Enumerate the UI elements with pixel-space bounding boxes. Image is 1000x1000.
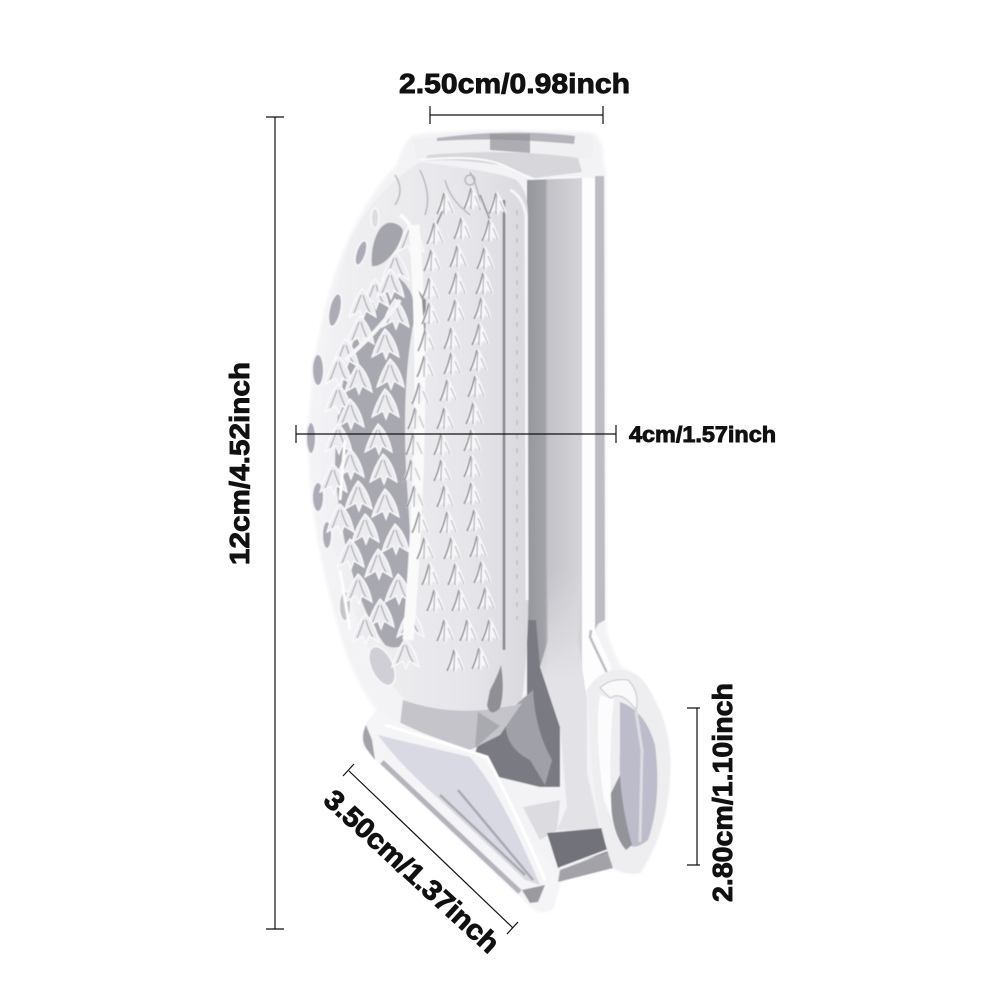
dimension: top width: 2.50cm/0.98inch: [399, 68, 630, 99]
oval recessed zone: [335, 223, 415, 647]
dimension: top width: [399, 68, 630, 124]
product: transparent sleeve: [306, 130, 670, 912]
dimension: total height: [224, 117, 284, 929]
textured panel: [320, 162, 528, 750]
side nubs: [306, 208, 401, 690]
neck rim: [414, 131, 593, 180]
dimension: bulb height: 2.80cm/1.10inch: [707, 683, 738, 902]
bottom flared lip: [362, 710, 560, 912]
embossed detail top-left: [395, 170, 492, 240]
smooth shaft with vertical shading: [470, 176, 613, 882]
side bulb: [587, 670, 670, 873]
dimension: bulb height: [687, 683, 738, 902]
scale texture: panel columns: [403, 186, 507, 673]
scale texture: inner oval: [320, 224, 424, 669]
dimension: lip width: 3.50cm/1.37inch: [318, 784, 506, 959]
dimension: total height: 12cm/4.52inch: [224, 362, 255, 565]
dimension: body width: [296, 422, 776, 447]
body silhouette: [308, 130, 670, 912]
dimension: body width: 4cm/1.57inch: [629, 422, 776, 447]
